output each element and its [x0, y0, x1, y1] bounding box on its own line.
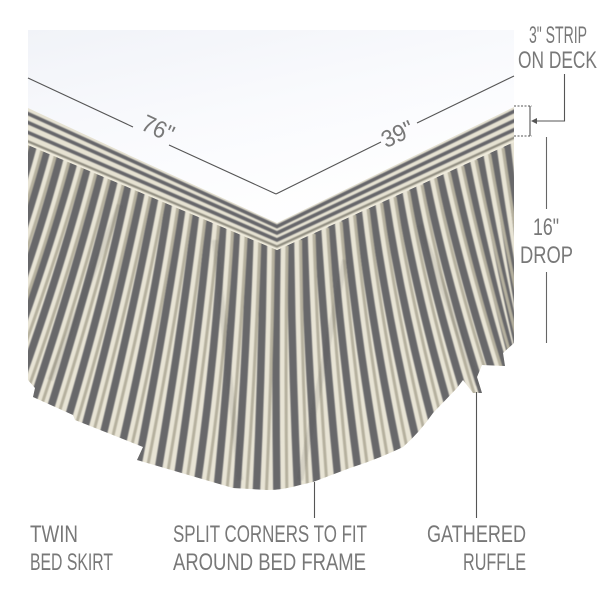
strip callout: 3 inch strip on deck	[514, 22, 597, 136]
callout: split corners: SPLIT CORNERS TO FIT	[173, 521, 367, 548]
dimension line: 39 inch	[276, 76, 514, 194]
arrow head	[531, 118, 537, 124]
label: twin bed skirt: TWIN	[30, 521, 78, 548]
label: twin bed skirt	[30, 521, 113, 576]
callout: split corners: AROUND BED FRAME	[173, 549, 366, 576]
pleat shadows	[50, 205, 478, 480]
drop callout: 16 inch drop: DROP	[520, 242, 573, 269]
striped gathered skirt	[28, 142, 514, 490]
callout: split corners	[173, 482, 367, 576]
bed sheet	[28, 30, 514, 226]
callout: gathered ruffle	[427, 392, 526, 576]
deck strip	[28, 107, 514, 250]
callout: gathered ruffle: GATHERED	[427, 521, 526, 548]
drop callout: 16 inch drop	[520, 137, 573, 343]
drop callout: 16 inch drop: 16"	[533, 214, 559, 241]
label: 76 inches: 76"	[137, 110, 178, 148]
label: 39 inches: 39"	[377, 115, 418, 154]
callout: gathered ruffle: RUFFLE	[463, 549, 526, 576]
label: twin bed skirt: BED SKIRT	[30, 549, 113, 576]
dimension line: 76 inch	[28, 78, 276, 194]
gather seam	[20, 139, 520, 250]
